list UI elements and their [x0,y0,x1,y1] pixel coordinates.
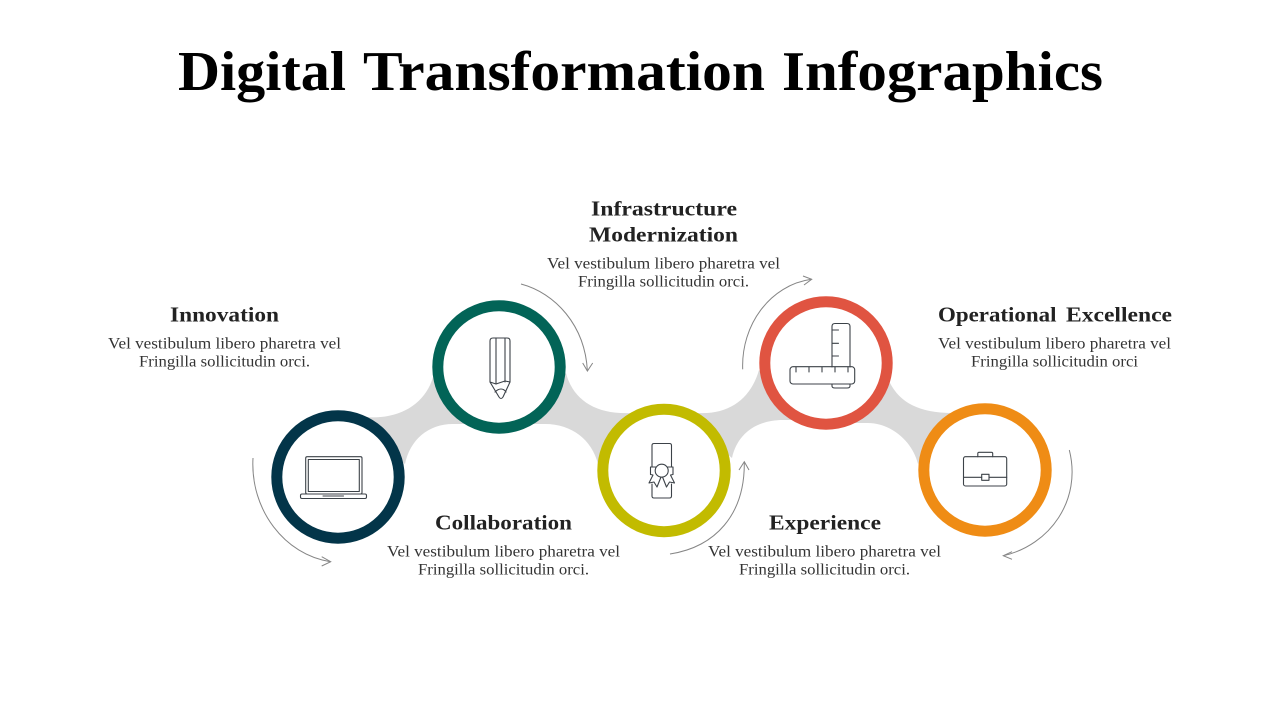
heading: Modernization [589,223,738,247]
description [547,256,781,290]
heading [938,303,1172,327]
icon: rulers [790,324,855,388]
arrow [253,458,331,566]
step 1: Innovation [108,303,399,566]
heading: Experience [769,511,881,535]
description [108,336,342,370]
description: Fringilla sollicitudin orci. [139,354,310,370]
icon: certificate [649,444,674,498]
description: Vel vestibulum libero pharetra vel [387,544,621,560]
heading [589,197,738,247]
arrow [1003,450,1072,559]
title: Transformation [363,41,765,103]
description: Fringilla sollicitudin orci. [418,562,589,578]
icon: laptop [300,457,366,498]
heading: Collaboration [435,511,572,535]
title: Infographics [782,41,1103,103]
heading: Infrastructure [591,197,737,221]
ring: navy [277,416,399,538]
description [708,544,942,578]
step 4: Experience [708,276,942,578]
title [178,41,1103,103]
description: Vel vestibulum libero pharetra vel [108,336,342,352]
arrow [521,284,593,371]
ring: green [438,306,560,428]
heading: Operational [938,303,1057,327]
ring: red [765,302,887,424]
step 5: Operational Excellence [924,303,1172,559]
ring: orange [924,409,1046,531]
icon: pencil [490,338,510,398]
description: Fringilla sollicitudin orci. [739,562,910,578]
step 3: Infrastructure Modernization [547,197,781,554]
icon: briefcase [964,452,1007,486]
step 2: Collaboration [387,284,621,578]
description: Fringilla sollicitudin orci. [578,274,749,290]
description: Vel vestibulum libero pharetra vel [938,336,1172,352]
description: Fringilla sollicitudin orci [971,354,1139,370]
grey connecting ribbon [365,370,953,464]
ring: yellow [603,409,725,532]
description [387,544,621,578]
arrow [743,276,812,369]
heading: Innovation [170,303,279,327]
description: Vel vestibulum libero pharetra vel [708,544,942,560]
title: Digital [178,41,346,103]
description [938,336,1172,370]
arrow [670,462,749,554]
heading: Excellence [1066,303,1172,327]
description: Vel vestibulum libero pharetra vel [547,256,781,272]
